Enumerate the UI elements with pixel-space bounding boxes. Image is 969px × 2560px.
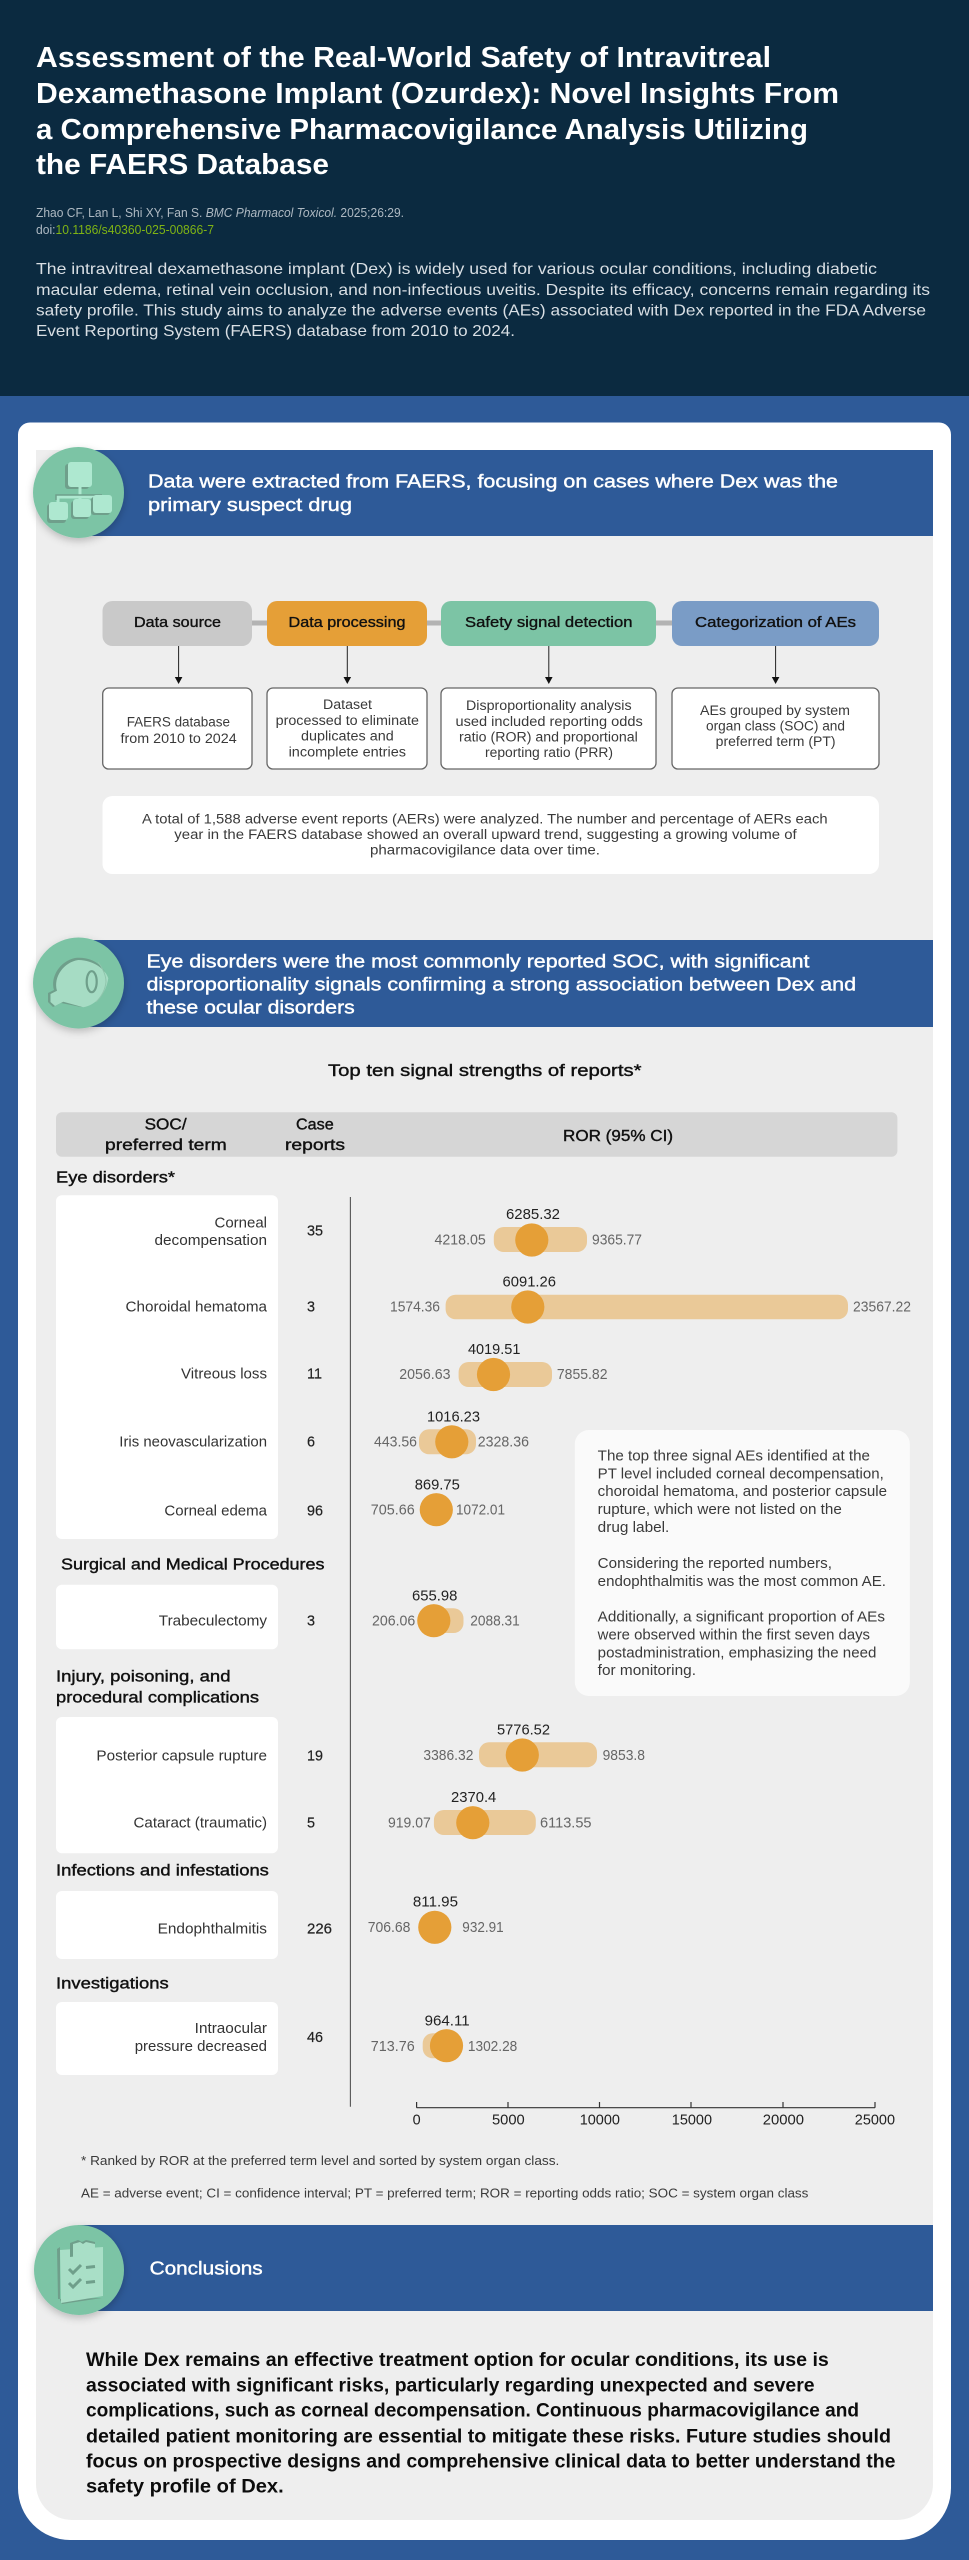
row: corneal decompensation: Corneal bbox=[214, 1214, 267, 1231]
section 2 heading: these ocular disorders bbox=[146, 997, 355, 1017]
footnotes: * Ranked by ROR at the preferred term level and sorted by system organ class. bbox=[81, 2154, 559, 2168]
row: posterior capsule rupture bbox=[96, 1721, 645, 1772]
row: intraocular pressure decreased: pressure decreased bbox=[135, 2038, 267, 2055]
callout: key findings: Considering the reported numbers, bbox=[598, 1556, 832, 1572]
row: vitreous loss: 11 bbox=[307, 1365, 322, 1382]
callout: total reports bbox=[102, 796, 879, 874]
citation: doi:10.1186/s40360-025-00866-7 bbox=[36, 222, 214, 237]
step: data source bbox=[102, 601, 252, 646]
label panel: infections bbox=[56, 1891, 278, 1959]
callout: key findings: were observed within the first seven days bbox=[597, 1627, 870, 1643]
row: trabeculectomy: Trabeculectomy bbox=[159, 1612, 268, 1629]
row: corneal edema: Corneal edema bbox=[164, 1502, 268, 1519]
row: posterior capsule rupture: 3386.32 bbox=[423, 1747, 473, 1764]
icon: clipboard bbox=[34, 2225, 124, 2315]
row: corneal edema: 705.66 bbox=[371, 1502, 415, 1519]
category heading: infections: Infections and infestations bbox=[56, 1863, 269, 1880]
row: cataract traumatic: 2370.4 bbox=[451, 1789, 496, 1806]
category heading: investigations: Investigations bbox=[56, 1975, 169, 1992]
introduction text bbox=[36, 261, 930, 340]
callout: key findings: drug label. bbox=[598, 1520, 669, 1536]
box: AEs grouped bbox=[672, 688, 879, 769]
section 1 heading bbox=[148, 472, 838, 515]
title: Assessment of the Real-World Safety of Intravitreal bbox=[36, 42, 771, 74]
row: intraocular pressure decreased: 46 bbox=[307, 2029, 323, 2046]
row: corneal decompensation bbox=[154, 1206, 642, 1257]
chart title: Top ten signal strengths of reports* bbox=[328, 1062, 642, 1080]
row: corneal decompensation: 9365.77 bbox=[592, 1231, 642, 1248]
box: dataset processing: duplicates and bbox=[301, 729, 394, 744]
row: iris neovascularization: 1016.23 bbox=[427, 1408, 480, 1425]
conclusions text: focus on prospective designs and comprehensive clinical data to better understand the bbox=[86, 2451, 896, 2472]
icon: eye bbox=[33, 938, 124, 1028]
box: FAERS database bbox=[103, 688, 252, 769]
callout: key findings: PT level included corneal decompensation, bbox=[598, 1466, 884, 1482]
table header: reports bbox=[285, 1137, 345, 1154]
row: vitreous loss bbox=[181, 1341, 608, 1391]
step: data processing: Data processing bbox=[288, 615, 406, 631]
row: iris neovascularization: 6 bbox=[307, 1433, 315, 1450]
arrow: safety signal bbox=[545, 646, 553, 684]
row: iris neovascularization: 2328.36 bbox=[478, 1434, 529, 1451]
introduction text: Event Reporting System (FAERS) database from 2010 to 2024. bbox=[36, 323, 515, 340]
introduction text: The intravitreal dexamethasone implant (Dex) is widely used for various ocular conditions, including diabetic bbox=[36, 261, 877, 278]
table header: ROR (95% CI) bbox=[563, 1128, 673, 1145]
row: corneal decompensation: decompensation bbox=[154, 1232, 267, 1249]
row: vitreous loss: Vitreous loss bbox=[181, 1365, 267, 1382]
box: disproportionality analysis: ratio (ROR) and proportional bbox=[459, 730, 638, 745]
section 2 heading: Eye disorders were the most commonly reported SOC, with significant bbox=[146, 951, 810, 971]
header band bbox=[0, 0, 969, 396]
category heading: injury bbox=[56, 1669, 259, 1707]
row: intraocular pressure decreased bbox=[135, 2012, 517, 2062]
box: dataset processing: incomplete entries bbox=[289, 744, 406, 759]
row: endophthalmitis: 811.95 bbox=[413, 1894, 458, 1911]
conclusions banner bbox=[34, 2225, 933, 2315]
conclusions text: detailed patient monitoring are essential to mitigate these risks. Future studies should bbox=[86, 2426, 891, 2447]
arrow: categorization bbox=[772, 646, 779, 684]
step: safety signal detection: Safety signal detection bbox=[465, 615, 632, 631]
row: choroidal hematoma bbox=[126, 1274, 911, 1324]
row: trabeculectomy: 3 bbox=[307, 1612, 315, 1629]
x axis: 0 bbox=[413, 2112, 421, 2129]
title: a Comprehensive Pharmacovigilance Analysis Utilizing bbox=[36, 114, 808, 146]
label panel: investigations bbox=[56, 2002, 278, 2075]
row: intraocular pressure decreased: Intraocular bbox=[195, 2020, 267, 2037]
conclusions text bbox=[86, 2350, 896, 2498]
label panel: eye disorders bbox=[56, 1195, 278, 1539]
row: trabeculectomy: 206.06 bbox=[372, 1613, 415, 1630]
callout: key findings: postadministration, emphasizing the need bbox=[598, 1645, 876, 1661]
box: disproportionality analysis: used included reporting odds bbox=[456, 714, 643, 729]
row: endophthalmitis bbox=[158, 1894, 504, 1944]
box: AEs grouped: organ class (SOC) and bbox=[706, 719, 845, 734]
row: corneal decompensation: 4218.05 bbox=[434, 1231, 486, 1248]
step: data processing bbox=[267, 601, 427, 646]
citation bbox=[36, 205, 404, 237]
callout: key findings: choroidal hematoma, and posterior capsule bbox=[598, 1484, 887, 1500]
box: FAERS database: from 2010 to 2024 bbox=[120, 731, 237, 746]
row: endophthalmitis: 226 bbox=[307, 1921, 332, 1938]
flow diagram bbox=[102, 601, 879, 769]
row: cataract traumatic: 6113.55 bbox=[540, 1814, 592, 1831]
box: dataset processing: processed to eliminate bbox=[276, 713, 419, 728]
box: disproportionality analysis: reporting ratio (PRR) bbox=[485, 745, 613, 760]
x axis: 20000 bbox=[763, 2112, 804, 2129]
box: disproportionality analysis bbox=[441, 688, 656, 769]
row: choroidal hematoma: 1574.36 bbox=[390, 1299, 440, 1316]
title: the FAERS Database bbox=[36, 149, 329, 181]
footnotes: AE = adverse event; CI = confidence interval; PT = preferred term; ROR = reporting odds ratio; SOC = system organ class bbox=[81, 2186, 808, 2200]
row: vitreous loss: 7855.82 bbox=[557, 1366, 608, 1383]
row: choroidal hematoma: 23567.22 bbox=[853, 1299, 911, 1316]
row: trabeculectomy: 655.98 bbox=[412, 1587, 457, 1604]
category heading: surgical: Surgical and Medical Procedures bbox=[61, 1556, 324, 1573]
x axis: 15000 bbox=[672, 2112, 712, 2129]
table header: Case bbox=[296, 1116, 334, 1133]
arrow: data source bbox=[175, 646, 182, 684]
category heading: injury: procedural complications bbox=[56, 1690, 259, 1707]
category heading: injury: Injury, poisoning, and bbox=[56, 1669, 230, 1686]
row: posterior capsule rupture: 9853.8 bbox=[603, 1747, 645, 1764]
row: cataract traumatic: 919.07 bbox=[388, 1814, 431, 1831]
box: AEs grouped: preferred term (PT) bbox=[716, 734, 836, 749]
row: iris neovascularization: 443.56 bbox=[374, 1434, 417, 1451]
box: AEs grouped: AEs grouped by system bbox=[700, 703, 850, 718]
title bbox=[36, 42, 839, 181]
table header bbox=[56, 1112, 897, 1157]
table header: SOC/ bbox=[145, 1116, 187, 1133]
section 2 heading bbox=[146, 951, 856, 1017]
table header: preferred term bbox=[105, 1137, 227, 1154]
conclusions text: associated with significant risks, particularly regarding unexpected and severe bbox=[86, 2376, 815, 2397]
callout: key findings: rupture, which were not listed on the bbox=[598, 1502, 842, 1518]
row: intraocular pressure decreased: 713.76 bbox=[371, 2038, 415, 2055]
row: posterior capsule rupture: 5776.52 bbox=[497, 1721, 550, 1738]
row: corneal edema: 96 bbox=[307, 1502, 323, 1519]
row: corneal decompensation: 35 bbox=[307, 1223, 323, 1240]
row: endophthalmitis: 932.91 bbox=[462, 1919, 504, 1936]
callout: key findings: The top three signal AEs identified at the bbox=[598, 1449, 870, 1465]
row: corneal edema: 1072.01 bbox=[456, 1502, 505, 1519]
row: iris neovascularization bbox=[119, 1408, 529, 1458]
label panel: surgical bbox=[56, 1585, 278, 1649]
label panel: injury bbox=[56, 1717, 278, 1853]
section 1 heading: primary suspect drug bbox=[148, 495, 352, 515]
step: categorization of AEs bbox=[672, 601, 879, 646]
callout: key findings: Additionally, a significant proportion of AEs bbox=[598, 1610, 885, 1626]
row: endophthalmitis: 706.68 bbox=[368, 1919, 410, 1936]
box: FAERS database: FAERS database bbox=[127, 715, 230, 730]
callout: total reports: A total of 1,588 adverse event reports (AERs) were analyzed. The number and percentage of AERs each bbox=[142, 811, 828, 826]
grey inner panel bbox=[36, 450, 933, 2520]
row: iris neovascularization: Iris neovascularization bbox=[119, 1433, 267, 1450]
box: disproportionality analysis: Disproportionality analysis bbox=[466, 698, 632, 713]
row: cataract traumatic: 5 bbox=[307, 1814, 315, 1831]
box: dataset processing: Dataset bbox=[323, 697, 372, 712]
row: choroidal hematoma: 3 bbox=[307, 1299, 315, 1316]
row: endophthalmitis: Endophthalmitis bbox=[158, 1921, 267, 1938]
conclusions text: While Dex remains an effective treatment option for ocular conditions, its use is bbox=[86, 2350, 829, 2371]
row: cataract traumatic bbox=[134, 1789, 592, 1839]
row: posterior capsule rupture: Posterior capsule rupture bbox=[96, 1747, 267, 1764]
white outer card bbox=[18, 422, 951, 2540]
section 1 heading: Data were extracted from FAERS, focusing on cases where Dex was the bbox=[148, 472, 838, 492]
callout: total reports: pharmacovigilance data over time. bbox=[370, 843, 600, 858]
connectors bbox=[252, 620, 672, 626]
step: categorization of AEs: Categorization of AEs bbox=[695, 615, 856, 631]
box: dataset processing bbox=[267, 688, 427, 769]
row: choroidal hematoma: Choroidal hematoma bbox=[126, 1299, 268, 1316]
callout: key findings: for monitoring. bbox=[598, 1663, 696, 1679]
category heading: eye disorders: Eye disorders* bbox=[56, 1170, 175, 1187]
introduction text: macular edema, retinal vein occlusion, and non-infectious uveitis. Despite its efficacy, concerns remain regarding its bbox=[36, 282, 930, 299]
chart axis line vertical bbox=[349, 1197, 351, 2107]
section 1 banner bbox=[33, 447, 933, 538]
step: data source: Data source bbox=[134, 615, 221, 631]
section 2 heading: disproportionality signals confirming a strong association between Dex and bbox=[146, 975, 856, 995]
conclusions heading: Conclusions bbox=[150, 2258, 263, 2278]
section 2 banner bbox=[33, 938, 933, 1028]
row: trabeculectomy bbox=[159, 1587, 520, 1637]
callout: total reports: year in the FAERS database showed an overall upward trend, suggesting a growing volume of bbox=[174, 827, 797, 842]
callout: key findings bbox=[575, 1430, 910, 1696]
row: choroidal hematoma: 6091.26 bbox=[502, 1274, 556, 1291]
callout: key findings: endophthalmitis was the most common AE. bbox=[598, 1574, 886, 1590]
step: safety signal detection bbox=[441, 601, 656, 646]
conclusions text: complications, such as corneal decompensation. Continuous pharmacovigilance and bbox=[86, 2401, 859, 2422]
conclusions text: safety profile of Dex. bbox=[86, 2477, 284, 2498]
arrow: data processing bbox=[344, 646, 351, 684]
x axis: 5000 bbox=[492, 2112, 525, 2129]
row: intraocular pressure decreased: 1302.28 bbox=[468, 2038, 517, 2055]
row: vitreous loss: 2056.63 bbox=[399, 1366, 450, 1383]
row: corneal edema bbox=[164, 1476, 505, 1526]
row: cataract traumatic: Cataract (traumatic) bbox=[134, 1814, 267, 1831]
citation: Zhao CF, Lan L, Shi XY, Fan S. BMC Pharmacol Toxicol. 2025;26:29. bbox=[36, 205, 404, 220]
icon: hierarchy blocks bbox=[33, 447, 124, 538]
row: corneal decompensation: 6285.32 bbox=[506, 1206, 560, 1223]
title: Dexamethasone Implant (Ozurdex): Novel Insights From bbox=[36, 78, 839, 110]
row: vitreous loss: 4019.51 bbox=[468, 1341, 520, 1358]
x axis: 10000 bbox=[580, 2112, 620, 2129]
introduction text: safety profile. This study aims to analyze the adverse events (AEs) associated with Dex reported in the FDA Adverse bbox=[36, 302, 926, 320]
row: intraocular pressure decreased: 964.11 bbox=[425, 2012, 470, 2029]
row: trabeculectomy: 2088.31 bbox=[470, 1613, 520, 1630]
row: corneal edema: 869.75 bbox=[415, 1476, 460, 1493]
x axis bbox=[413, 2102, 895, 2129]
footnotes bbox=[81, 2154, 808, 2200]
row: posterior capsule rupture: 19 bbox=[307, 1747, 323, 1764]
x axis: 25000 bbox=[855, 2112, 895, 2129]
